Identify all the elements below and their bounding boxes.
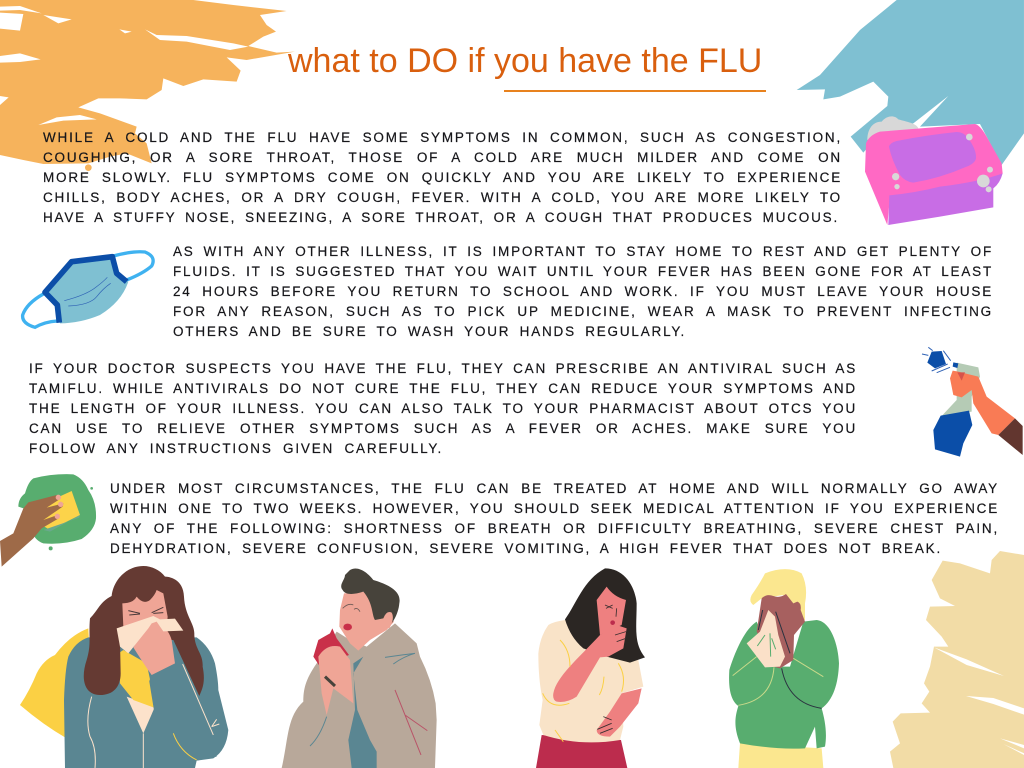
icon: face mask [23, 252, 153, 327]
text block: cold versus flu: COUGHING, OR A SORE THROAT, THOSE OF A COLD ARE MUCH MILDER AND COME ON [43, 150, 842, 165]
person: woman blowing nose [20, 566, 228, 768]
person: woman coughing [536, 568, 645, 768]
text block: antivirals: IF YOUR DOCTOR SUSPECTS YOU HAVE THE FLU, THEY CAN PRESCRIBE AN ANTIVIRAL SUCH AS [29, 361, 857, 376]
text block: antivirals: TAMIFLU. WHILE ANTIVIRALS DO NOT CURE THE FLU, THEY CAN REDUCE YOUR SYMPTOMS AND [29, 381, 857, 396]
text block: cold versus flu [43, 130, 842, 225]
orange brush stroke [0, 0, 295, 171]
title: what to DO if you have the FLU [288, 42, 762, 80]
teal brush stroke [797, 0, 1024, 165]
text block: stay home and rest: OTHERS AND BE SURE TO WASH YOUR HANDS REGULARLY. [173, 324, 686, 339]
person: man with tissue [729, 569, 839, 768]
text block: antivirals: THE LENGTH OF YOUR ILLNESS. YOU CAN ALSO TALK TO YOUR PHARMACIST ABOUT OTCS YOU [29, 401, 857, 416]
text block: cold versus flu: CHILLS, BODY ACHES, OR A DRY COUGH, FEVER. WITH A COLD, YOU ARE MORE LIKELY TO [43, 190, 842, 205]
text block: when to seek medical attention: DEHYDRATION, SEVERE CONFUSION, SEVERE VOMITING, A HIGH FEVER THAT DOES NOT BREAK. [110, 541, 942, 556]
cream brush stroke [890, 551, 1024, 768]
text block: stay home and rest: FLUIDS. IT IS SUGGESTED THAT YOU WAIT UNTIL YOUR FEVER HAS BEEN GONE FOR AT LEAST [173, 264, 993, 279]
text block: antivirals: CAN USE TO RELIEVE OTHER SYMPTOMS SUCH AS A FEVER OR ACHES. MAKE SURE YOU [29, 421, 857, 436]
icon: spray bottle in hand [922, 347, 1023, 457]
title underline [504, 90, 766, 92]
text block: antivirals [29, 361, 857, 456]
text block: when to seek medical attention: UNDER MOST CIRCUMSTANCES, THE FLU CAN BE TREATED AT HOME AND WILL NORMALLY GO AWAY [110, 481, 999, 496]
text block: when to seek medical attention: WITHIN ONE TO TWO WEEKS. HOWEVER, YOU SHOULD SEEK MEDICAL ATTENTION IF YOU EXPERIENCE [110, 501, 999, 516]
text block: cold versus flu: MORE SLOWLY. FLU SYMPTOMS COME ON QUICKLY AND YOU ARE LIKELY TO EXPERIENCE [43, 170, 842, 185]
icon: hand with sponge [0, 474, 96, 567]
text block: stay home and rest: AS WITH ANY OTHER ILLNESS, IT IS IMPORTANT TO STAY HOME TO REST AND GET PLENTY OF [173, 244, 993, 259]
text block: stay home and rest: 24 HOURS BEFORE YOU RETURN TO SCHOOL AND WORK. IF YOU MUST LEAVE YOUR HOUSE [173, 284, 993, 299]
text block: stay home and rest: FOR ANY REASON, SUCH AS TO PICK UP MEDICINE, WEAR A MASK TO PREVENT INFECTING [173, 304, 993, 319]
text block: antivirals: FOLLOW ANY INSTRUCTIONS GIVEN CAREFULLY. [29, 441, 443, 456]
text block: when to seek medical attention [110, 481, 999, 556]
person: man in blanket [282, 568, 437, 768]
text block: cold versus flu: WHILE A COLD AND THE FLU HAVE SOME SYMPTOMS IN COMMON, SUCH AS CONGESTION, [43, 130, 842, 145]
text block: stay home and rest [172, 244, 993, 339]
text block: when to seek medical attention: ANY OF THE FOLLOWING: SHORTNESS OF BREATH OR DIFFICULTY BREATHING, SEVERE CHEST PAIN, [110, 521, 999, 536]
icon: pink soap bar [865, 116, 1003, 225]
text block: cold versus flu: HAVE A STUFFY NOSE, SNEEZING, A SORE THROAT, OR A COUGH THAT PRODUCES MUCOUS. [43, 210, 839, 225]
